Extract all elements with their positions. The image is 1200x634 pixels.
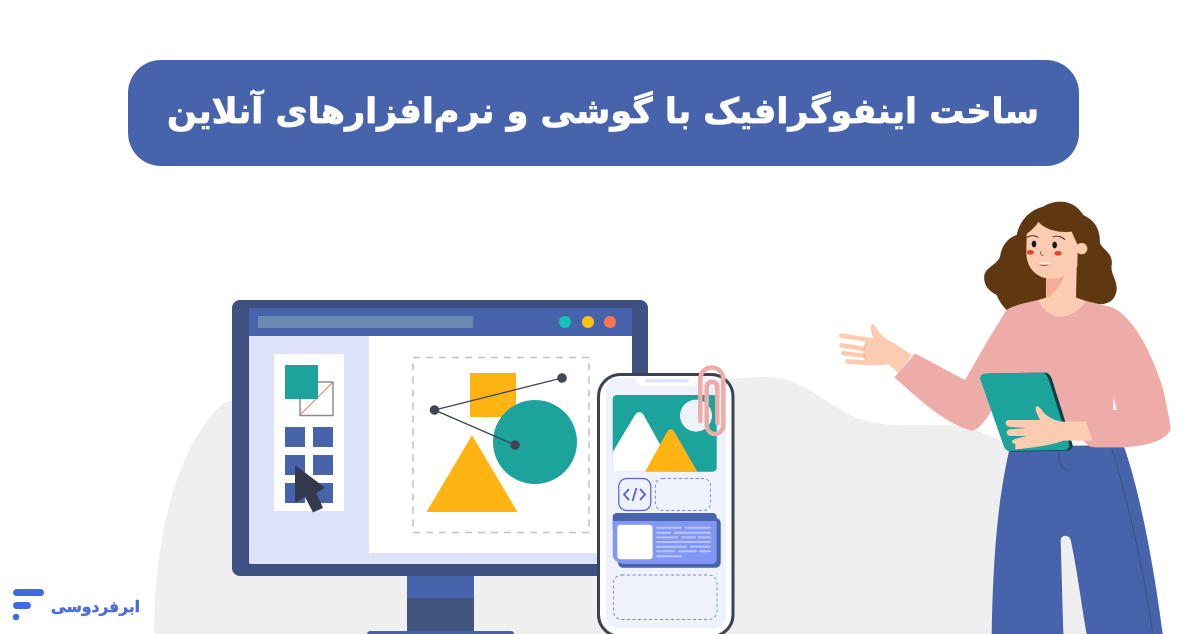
screen [249, 308, 632, 564]
background blob [154, 377, 1100, 634]
window title bar [249, 308, 632, 336]
monitor [232, 300, 648, 634]
logo wordmark: ابرفردوسی [51, 598, 140, 616]
face [1026, 222, 1087, 279]
neck [1046, 253, 1077, 299]
article card [613, 513, 721, 568]
phone [598, 368, 733, 634]
pants [992, 445, 1163, 634]
code icon box [619, 478, 651, 510]
design canvas [413, 358, 589, 532]
phone image card [613, 395, 717, 472]
pointing hand [841, 324, 912, 373]
monitor stand [367, 574, 514, 634]
holding hand [1006, 406, 1093, 449]
hair [984, 202, 1117, 310]
brand logo [13, 589, 140, 620]
icon: mouse cursor [295, 465, 325, 512]
woman character [841, 202, 1171, 634]
logo mark [13, 589, 44, 620]
dashed placeholder [656, 478, 710, 510]
monitor frame [232, 300, 648, 576]
tablet [980, 373, 1073, 452]
title banner [128, 60, 1079, 166]
icon: paperclip [700, 368, 723, 434]
sweater [894, 298, 1171, 447]
title text: ساخت اینفوگرافیک با گوشی و نرم‌افزارهای آنلاین [167, 89, 1039, 132]
tool palette [274, 354, 344, 511]
dashed placeholder large [614, 575, 717, 620]
